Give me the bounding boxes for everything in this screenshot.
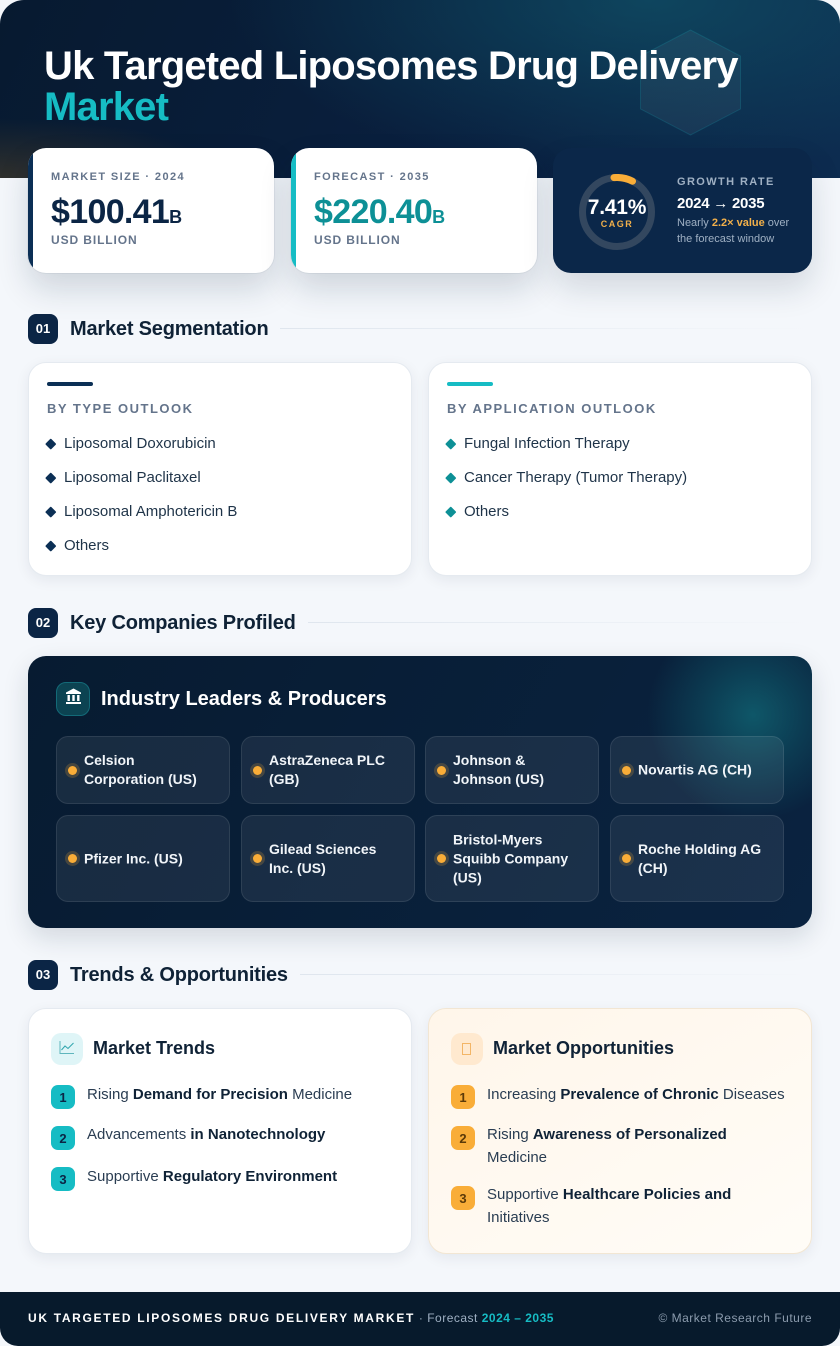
list item: Others bbox=[464, 503, 509, 520]
panel: market trends: Advancements in Nanotechnology bbox=[87, 1126, 325, 1143]
icon: placeholder box bbox=[451, 1033, 483, 1065]
company: novartis bbox=[610, 736, 784, 804]
company: johnson bbox=[425, 736, 599, 804]
hexagon decoration bbox=[640, 30, 741, 136]
section heading: key companies: Key Companies Profiled bbox=[70, 612, 296, 634]
icon: chart bbox=[51, 1033, 83, 1065]
opportunity 2 bbox=[451, 1126, 727, 1166]
panel: market opportunities: Rising Awareness of Personalized bbox=[487, 1126, 727, 1143]
panel: market opportunities: Medicine bbox=[487, 1148, 547, 1166]
panel: market opportunities: 1 bbox=[459, 1090, 467, 1105]
kpi card: market size: USD BILLION bbox=[51, 233, 138, 247]
company: astrazeneca: AstraZeneca PLC (GB) bbox=[269, 752, 385, 787]
panel heading: Market Trends bbox=[93, 1038, 215, 1058]
kpi card: forecast bbox=[291, 148, 537, 273]
footer title: UK TARGETED LIPOSOMES DRUG DELIVERY MARKET · Forecast 2024 – 2035 bbox=[28, 1311, 554, 1325]
panel: market opportunities: 2 bbox=[459, 1131, 467, 1146]
panel: market trends: 2 bbox=[59, 1131, 67, 1146]
panel: market trends: Rising Demand for Precision Medicine bbox=[87, 1086, 352, 1103]
kpi card: market size: MARKET SIZE · 2024 bbox=[51, 171, 185, 183]
company: johnson: Johnson & Johnson (US) bbox=[453, 752, 544, 787]
list item: Liposomal Doxorubicin bbox=[64, 435, 216, 452]
kpi card: forecast: $220.40B bbox=[314, 193, 445, 231]
panel: market opportunities: 3 bbox=[459, 1191, 467, 1206]
title: Market bbox=[44, 85, 168, 129]
panel: market opportunities: Increasing Prevalence of Chronic Diseases bbox=[487, 1086, 785, 1103]
section heading: market segmentation: Market Segmentation bbox=[70, 318, 268, 340]
trend 3 bbox=[51, 1167, 337, 1191]
footer bbox=[0, 1292, 840, 1346]
opportunity 1 bbox=[451, 1085, 785, 1109]
section heading: trends and opportunities: 03 bbox=[36, 967, 50, 982]
growth description bbox=[677, 217, 789, 245]
kpi card: market size: $100.41B bbox=[51, 193, 182, 231]
cagr ring bbox=[579, 174, 655, 250]
company: gilead: Gilead Sciences Inc. (US) bbox=[269, 840, 376, 876]
panel: by type outlook bbox=[28, 362, 412, 576]
company: roche bbox=[610, 815, 784, 902]
section heading: market segmentation: 01 bbox=[36, 321, 50, 336]
growth description: the forecast window bbox=[677, 233, 774, 245]
kpi card: growth rate bbox=[553, 148, 812, 273]
kpi card: forecast: USD BILLION bbox=[314, 233, 401, 247]
title bbox=[44, 44, 738, 129]
company: novartis: Novartis AG (CH) bbox=[638, 762, 752, 778]
title: Uk Targeted Liposomes Drug Delivery bbox=[44, 44, 738, 88]
icon: bank bbox=[56, 682, 90, 716]
section heading: trends and opportunities bbox=[28, 960, 614, 990]
company: celsion: Celsion Corporation (US) bbox=[84, 752, 197, 787]
panel: market trends: Supportive Regulatory Environment bbox=[87, 1168, 337, 1185]
panel: market trends: 3 bbox=[59, 1172, 67, 1187]
panel: industry leaders bbox=[28, 656, 812, 928]
company: astrazeneca bbox=[241, 736, 415, 804]
list item: Liposomal Paclitaxel bbox=[64, 469, 201, 486]
cagr label: CAGR bbox=[601, 219, 633, 229]
section heading: key companies bbox=[28, 608, 618, 638]
trend 2 bbox=[51, 1126, 326, 1150]
panel: market opportunities: Supportive Healthcare Policies and bbox=[487, 1186, 731, 1203]
opportunity 3 bbox=[451, 1186, 731, 1226]
header banner bbox=[0, 0, 840, 178]
panel: market opportunities bbox=[428, 1008, 812, 1254]
section heading: trends and opportunities: Trends & Opportunities bbox=[70, 964, 288, 986]
section heading: key companies: 02 bbox=[36, 615, 50, 630]
kpi card: forecast: FORECAST · 2035 bbox=[314, 171, 430, 183]
panel: market trends: 1 bbox=[59, 1090, 67, 1105]
growth rate label: GROWTH RATE bbox=[677, 176, 775, 188]
panel: by application outlook bbox=[428, 362, 812, 576]
panel: market trends bbox=[28, 1008, 412, 1254]
growth years: 2024 → 2035 bbox=[677, 195, 764, 212]
panel: by type outlook: BY TYPE OUTLOOK bbox=[47, 401, 194, 416]
footer credit: © Market Research Future bbox=[658, 1311, 812, 1325]
panel: market opportunities: Initiatives bbox=[487, 1208, 550, 1226]
company: pfizer bbox=[56, 815, 230, 902]
panel: by application outlook: BY APPLICATION OUTLOOK bbox=[447, 401, 657, 416]
company: roche: Roche Holding AG (CH) bbox=[638, 840, 761, 876]
company: pfizer: Pfizer Inc. (US) bbox=[84, 850, 183, 866]
company: gilead bbox=[241, 815, 415, 902]
panel heading: Market Opportunities bbox=[493, 1038, 674, 1058]
company: celsion bbox=[56, 736, 230, 804]
section heading: market segmentation bbox=[28, 314, 608, 344]
trend 1 bbox=[51, 1085, 352, 1109]
list item: Others bbox=[64, 537, 109, 554]
company: bristol-myers: Bristol-Myers Squibb Company (US) bbox=[453, 831, 568, 885]
cagr value: 7.41% bbox=[588, 196, 646, 219]
list item: Fungal Infection Therapy bbox=[464, 435, 630, 452]
list item: Liposomal Amphotericin B bbox=[64, 503, 237, 520]
panel heading: Industry Leaders & Producers bbox=[101, 688, 387, 710]
growth description: Nearly 2.2× value over bbox=[677, 217, 789, 229]
list item: Cancer Therapy (Tumor Therapy) bbox=[464, 469, 687, 486]
company: bristol-myers bbox=[425, 815, 599, 902]
kpi card: market size bbox=[28, 148, 274, 273]
